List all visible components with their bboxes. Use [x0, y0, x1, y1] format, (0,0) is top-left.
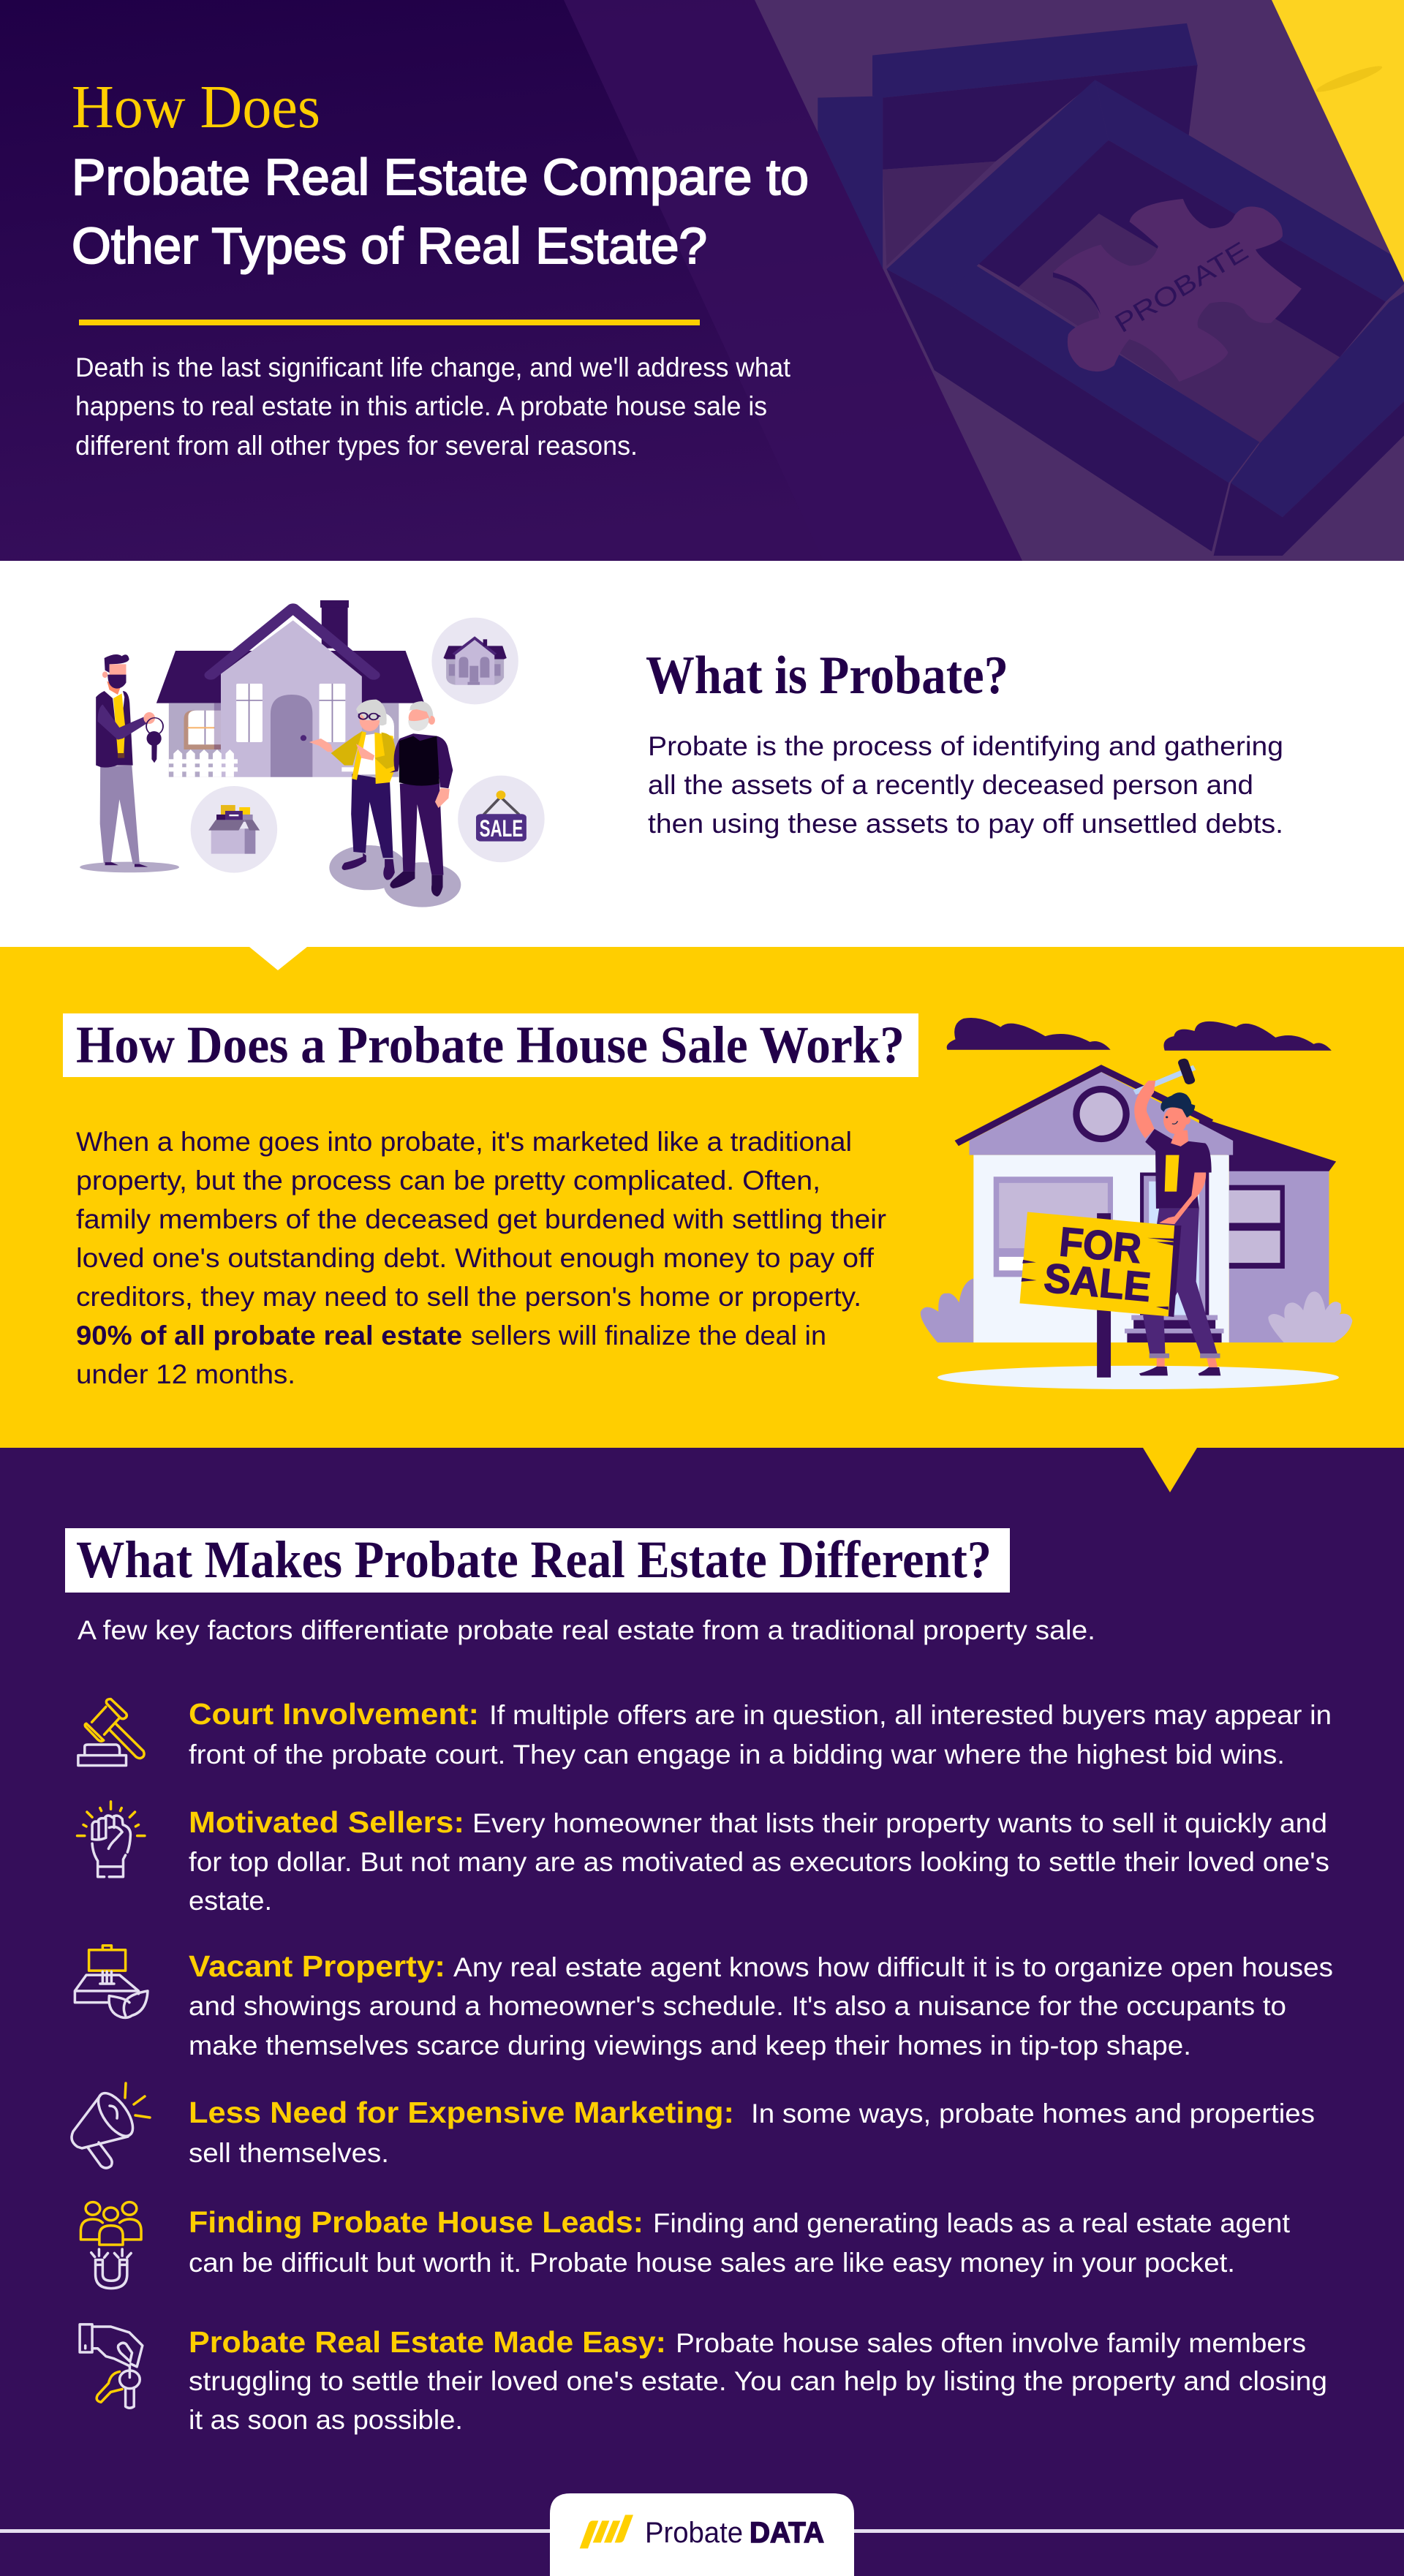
- intro text: [75, 352, 791, 461]
- sign board: [1168, 1225, 1181, 1317]
- agent with keys: [96, 654, 163, 867]
- title: Probate Real Estate Compare to: [72, 148, 809, 205]
- item: finding probate house leads: Finding Probate House Leads:: [189, 2205, 644, 2239]
- sale process text: sellers will finalize the deal in: [471, 1321, 826, 1351]
- item: motivated sellers: Every homeowner that lists their property wants to sell it quickly and: [472, 1808, 1327, 1838]
- house: [156, 600, 424, 777]
- logo wordmark: [645, 2517, 824, 2549]
- panel: what is probate: [0, 561, 1404, 947]
- sign lettering: FOR: [1057, 1218, 1143, 1272]
- item: finding probate house leads: Finding and generating leads as a real estate agent: [653, 2208, 1291, 2238]
- icon: vacant property sign: [75, 1946, 148, 2017]
- sale process text: property, but the process can be pretty complicated. Often,: [76, 1166, 820, 1196]
- title: Other Types of Real Estate?: [72, 217, 707, 274]
- heading: what makes probate different: What Makes Probate Real Estate Different?: [76, 1530, 992, 1589]
- intro text: different from all other types for several reasons.: [75, 431, 638, 461]
- item: motivated sellers: for top dollar. But not many are as motivated as executors looking to settle their loved one's: [189, 1847, 1329, 1877]
- sign post: [1097, 1213, 1111, 1378]
- probate definition text: all the assets of a recently deceased person and: [648, 770, 1253, 800]
- sale process text: under 12 months.: [76, 1359, 295, 1389]
- item: court involvement: Court Involvement:: [189, 1697, 479, 1731]
- item: motivated sellers: [189, 1805, 1329, 1916]
- logo wordmark: Probate: [645, 2517, 743, 2549]
- item: less need for expensive marketing: In some ways, probate homes and properties: [751, 2099, 1315, 2129]
- sale process text: creditors, they may need to sell the person's home or property.: [76, 1282, 861, 1312]
- item: probate real estate made easy: it as soon as possible.: [189, 2405, 463, 2435]
- probate definition text: then using these assets to pay off unsettled debts.: [648, 809, 1283, 839]
- item: vacant property: make themselves scarce during viewings and keep their homes in tip-top shape.: [189, 2031, 1191, 2061]
- icon: leads and magnet: [80, 2202, 141, 2289]
- intro text: Death is the last significant life change, and we'll address what: [75, 352, 791, 382]
- item: finding probate house leads: can be difficult but worth it. Probate house sales are like easy money in your pocket.: [189, 2248, 1235, 2278]
- title: [72, 73, 809, 274]
- house: [921, 1068, 1352, 1342]
- illustration: for sale house with worker: [921, 1018, 1352, 1389]
- icon: megaphone: [72, 2083, 150, 2168]
- intro sentence: A few key factors differentiate probate real estate from a traditional property sale.: [78, 1615, 1095, 1645]
- sign lettering: SALE: [1042, 1254, 1152, 1310]
- icon: gavel: [78, 1699, 144, 1766]
- intro text: happens to real estate in this article. A probate house sale is: [75, 391, 767, 421]
- yellow corner: [1272, 0, 1404, 282]
- sign lettering: [1042, 1218, 1152, 1310]
- sale process text: When a home goes into probate, it's marketed like a traditional: [76, 1127, 852, 1157]
- moving box badge: [208, 805, 260, 854]
- logo wordmark: DATA: [750, 2517, 824, 2549]
- footer with logo: [0, 2493, 1404, 2576]
- logo mark: [580, 2515, 633, 2548]
- panel: header: [0, 0, 1404, 561]
- sale process text: family members of the deceased get burdened with settling their: [76, 1204, 886, 1234]
- mini house badge: [443, 638, 507, 685]
- item: probate real estate made easy: Probate Real Estate Made Easy:: [189, 2325, 666, 2359]
- item: less need for expensive marketing: [189, 2096, 1315, 2168]
- sale sign badge: SALE: [480, 815, 523, 842]
- item: probate real estate made easy: [189, 2325, 1327, 2435]
- fence: [169, 749, 399, 777]
- sale sign badge: [476, 790, 526, 842]
- icon: raised fist: [78, 1802, 145, 1877]
- sale process text: [76, 1127, 886, 1389]
- item: less need for expensive marketing: sell themselves.: [189, 2138, 389, 2168]
- header photo: puzzle piece in blocks: [755, 0, 1404, 561]
- probate definition text: [648, 731, 1283, 839]
- heading: what is probate: What is Probate?: [646, 646, 1008, 706]
- probate definition text: Probate is the process of identifying and gathering: [648, 731, 1283, 761]
- heading: how does a probate house sale work: How Does a Probate House Sale Work?: [76, 1016, 905, 1074]
- item: less need for expensive marketing: Less Need for Expensive Marketing:: [189, 2096, 734, 2129]
- item: motivated sellers: estate.: [189, 1886, 272, 1916]
- title: How Does: [72, 73, 320, 141]
- puzzle label: PROBATE: [1109, 235, 1253, 339]
- item: court involvement: If multiple offers are in question, all interested buyers may appear in: [489, 1700, 1332, 1730]
- item: probate real estate made easy: Probate house sales often involve family members: [676, 2328, 1306, 2358]
- elderly couple: [309, 700, 453, 896]
- item: court involvement: front of the probate court. They can engage in a bidding war where the highest bid wins.: [189, 1740, 1285, 1769]
- item: vacant property: Any real estate agent knows how difficult it is to organize open houses: [453, 1952, 1333, 1982]
- sale process text: 90% of all probate real estate: [76, 1321, 462, 1351]
- illustration: agent, house and couple: [80, 600, 545, 907]
- item: finding probate house leads: [189, 2205, 1291, 2278]
- item: vacant property: and showings around a homeowner's schedule. It's also a nuisance for the occupants to: [189, 1991, 1286, 2021]
- panel: how a probate house sale works: [0, 947, 1404, 1448]
- item: motivated sellers: Motivated Sellers:: [189, 1805, 464, 1839]
- clouds: [947, 1018, 1332, 1051]
- panel: what makes probate real estate different: [0, 1448, 1404, 2576]
- item: vacant property: Vacant Property:: [189, 1949, 445, 1983]
- item: court involvement: [189, 1697, 1332, 1769]
- worker: [1134, 1057, 1220, 1375]
- item: vacant property: [189, 1949, 1333, 2061]
- sale process text: loved one's outstanding debt. Without enough money to pay off: [76, 1243, 875, 1273]
- ground: [937, 1366, 1339, 1389]
- icon: hand with keys: [80, 2324, 143, 2408]
- item: probate real estate made easy: struggling to settle their loved one's estate. You can help by listing the property and closing: [189, 2366, 1327, 2396]
